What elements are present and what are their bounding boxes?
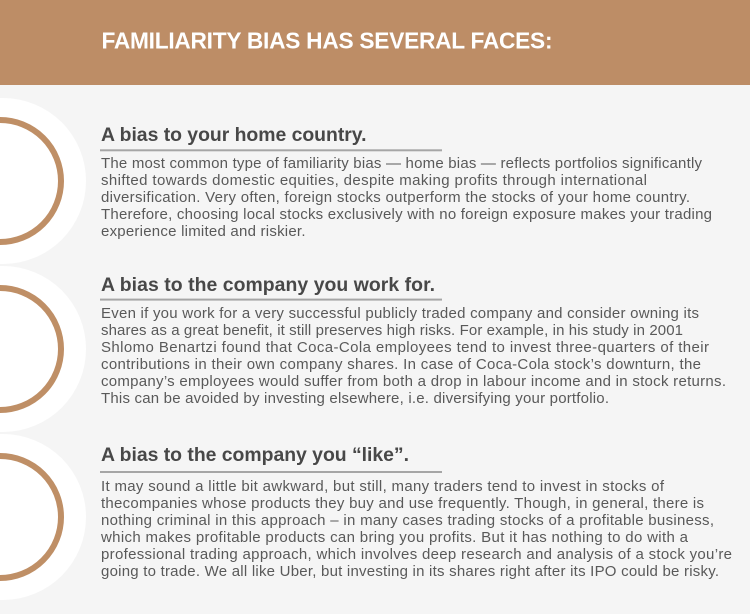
text block: employer: company’s employees would suffer from both a drop in labour income and in stock returns.: [101, 373, 726, 390]
text block: home country: The most common type of familiarity bias — home bias — reflects portfolios significantly: [101, 155, 702, 172]
heading: liked company: A bias to the company you “like”.: [101, 444, 409, 466]
icon: ring badge 2: [0, 266, 86, 432]
text block: employer: Shlomo Benartzi found that Coca-Cola employees tend to invest three-quarters of their: [101, 339, 709, 356]
heading: employer: A bias to the company you work for.: [101, 274, 435, 296]
text block: employer: shares as a great benefit, it still preserves high risks. For example, in his study in 2001: [101, 322, 683, 339]
text block: liked company: thecompanies whose products they buy and use frequently. Though, in general, there is: [101, 495, 704, 512]
text block: home country: diversification. Very often, foreign stocks outperform the stocks of your home country.: [101, 189, 690, 206]
text block: liked company: It may sound a little bit awkward, but still, many traders tend to invest in stocks of: [101, 478, 665, 495]
text block: liked company: which makes profitable products can bring you profits. But it has nothing to do with a: [100, 529, 689, 546]
text block: employer: Even if you work for a very successful publicly traded company and consider owning its: [101, 305, 699, 322]
panel: employer bias: [0, 266, 726, 432]
icon: ring badge 3: [0, 434, 86, 600]
text block: home country: Therefore, choosing local stocks exclusively with no foreign exposure makes your trading: [101, 206, 712, 223]
text block: liked company: nothing criminal in this approach – in many cases trading stocks of a profitable business,: [101, 512, 714, 529]
icon: ring badge 1: [0, 98, 86, 264]
title: FAMILIARITY BIAS HAS SEVERAL FACES:: [102, 28, 552, 54]
text block: liked company: [100, 478, 732, 580]
text block: employer: This can be avoided by investing elsewhere, i.e. diversifying your portfolio.: [101, 390, 609, 407]
panel: home country bias: [0, 98, 712, 264]
header banner: [0, 0, 750, 85]
text block: liked company: professional trading approach, which involves deep research and analysis of a stock you’re: [101, 546, 732, 563]
panel: liked company bias: [0, 434, 732, 600]
text block: home country: experience limited and riskier.: [101, 223, 306, 240]
text block: employer: contributions in their own company shares. In case of Coca-Cola stock’s downturn, the: [101, 356, 701, 373]
text block: employer: [101, 305, 726, 407]
text block: home country: shifted towards domestic equities, despite making profits through international: [101, 172, 647, 189]
text block: liked company: going to trade. We all like Uber, but investing in its shares right after its IPO could be risky.: [101, 563, 719, 580]
heading: home country: A bias to your home country.: [101, 124, 366, 146]
text block: home country: [101, 155, 712, 240]
